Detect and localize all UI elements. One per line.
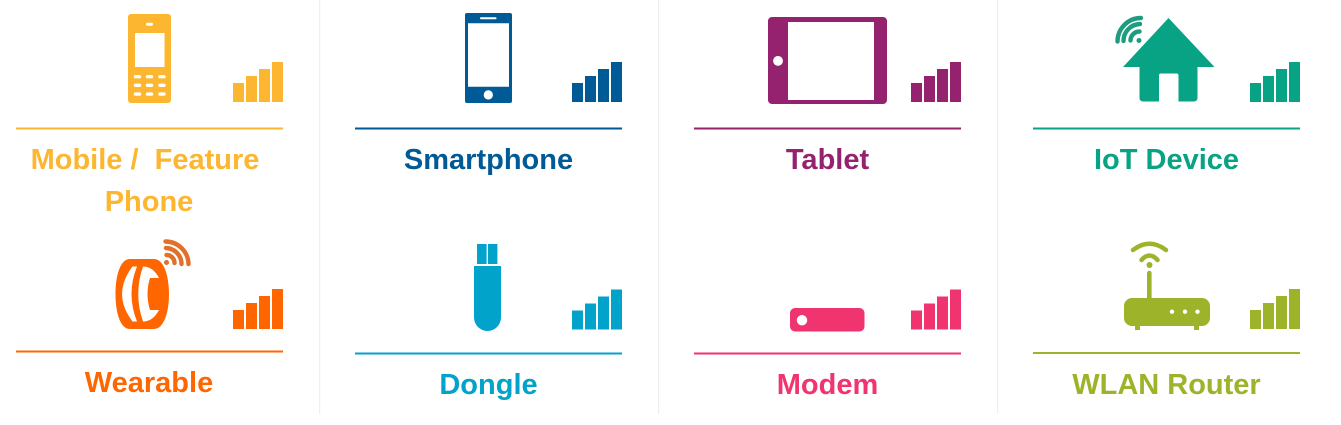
panel: wearable [16, 242, 283, 399]
icon: ring with wifi [116, 242, 188, 329]
icon: signal bars [911, 290, 961, 330]
icon: signal bars [1250, 62, 1300, 102]
label: Dongle: Dongle [439, 369, 538, 401]
icon: signal bars [1250, 289, 1300, 329]
icon: smartphone [465, 13, 512, 103]
label: Tablet: Tablet [786, 144, 869, 176]
label: IoT Device: IoT Device [1094, 144, 1239, 176]
icon: house with wifi [1118, 18, 1214, 102]
panel: IoT device [1033, 18, 1300, 176]
icon: signal bars [572, 62, 622, 102]
icon: signal bars [911, 62, 961, 102]
label: Mobile / Feature Phone: Mobile / Feature [31, 144, 259, 176]
label: Smartphone: Smartphone [404, 144, 573, 176]
icon: signal bars [572, 290, 622, 330]
icon: router with wifi [1124, 244, 1210, 330]
panel: dongle [355, 244, 622, 401]
icon: USB dongle [474, 244, 501, 331]
icon: signal bars [233, 289, 283, 329]
icon: feature phone [128, 14, 171, 103]
icon: modem [790, 308, 864, 332]
label: Mobile / Feature Phone: Phone [105, 186, 193, 218]
icon: tablet [768, 17, 887, 104]
label: Modem: Modem [777, 369, 878, 401]
panel: mobile / feature phone [16, 14, 283, 218]
label: WLAN Router: WLAN Router [1072, 369, 1261, 401]
panel: WLAN router [1033, 244, 1300, 401]
panel: smartphone [355, 13, 622, 176]
label: Wearable: Wearable [85, 367, 213, 399]
panel: tablet [694, 17, 961, 176]
icon: signal bars [233, 62, 283, 102]
panel: modem [694, 290, 961, 401]
label: Mobile / Feature Phone [31, 144, 259, 218]
